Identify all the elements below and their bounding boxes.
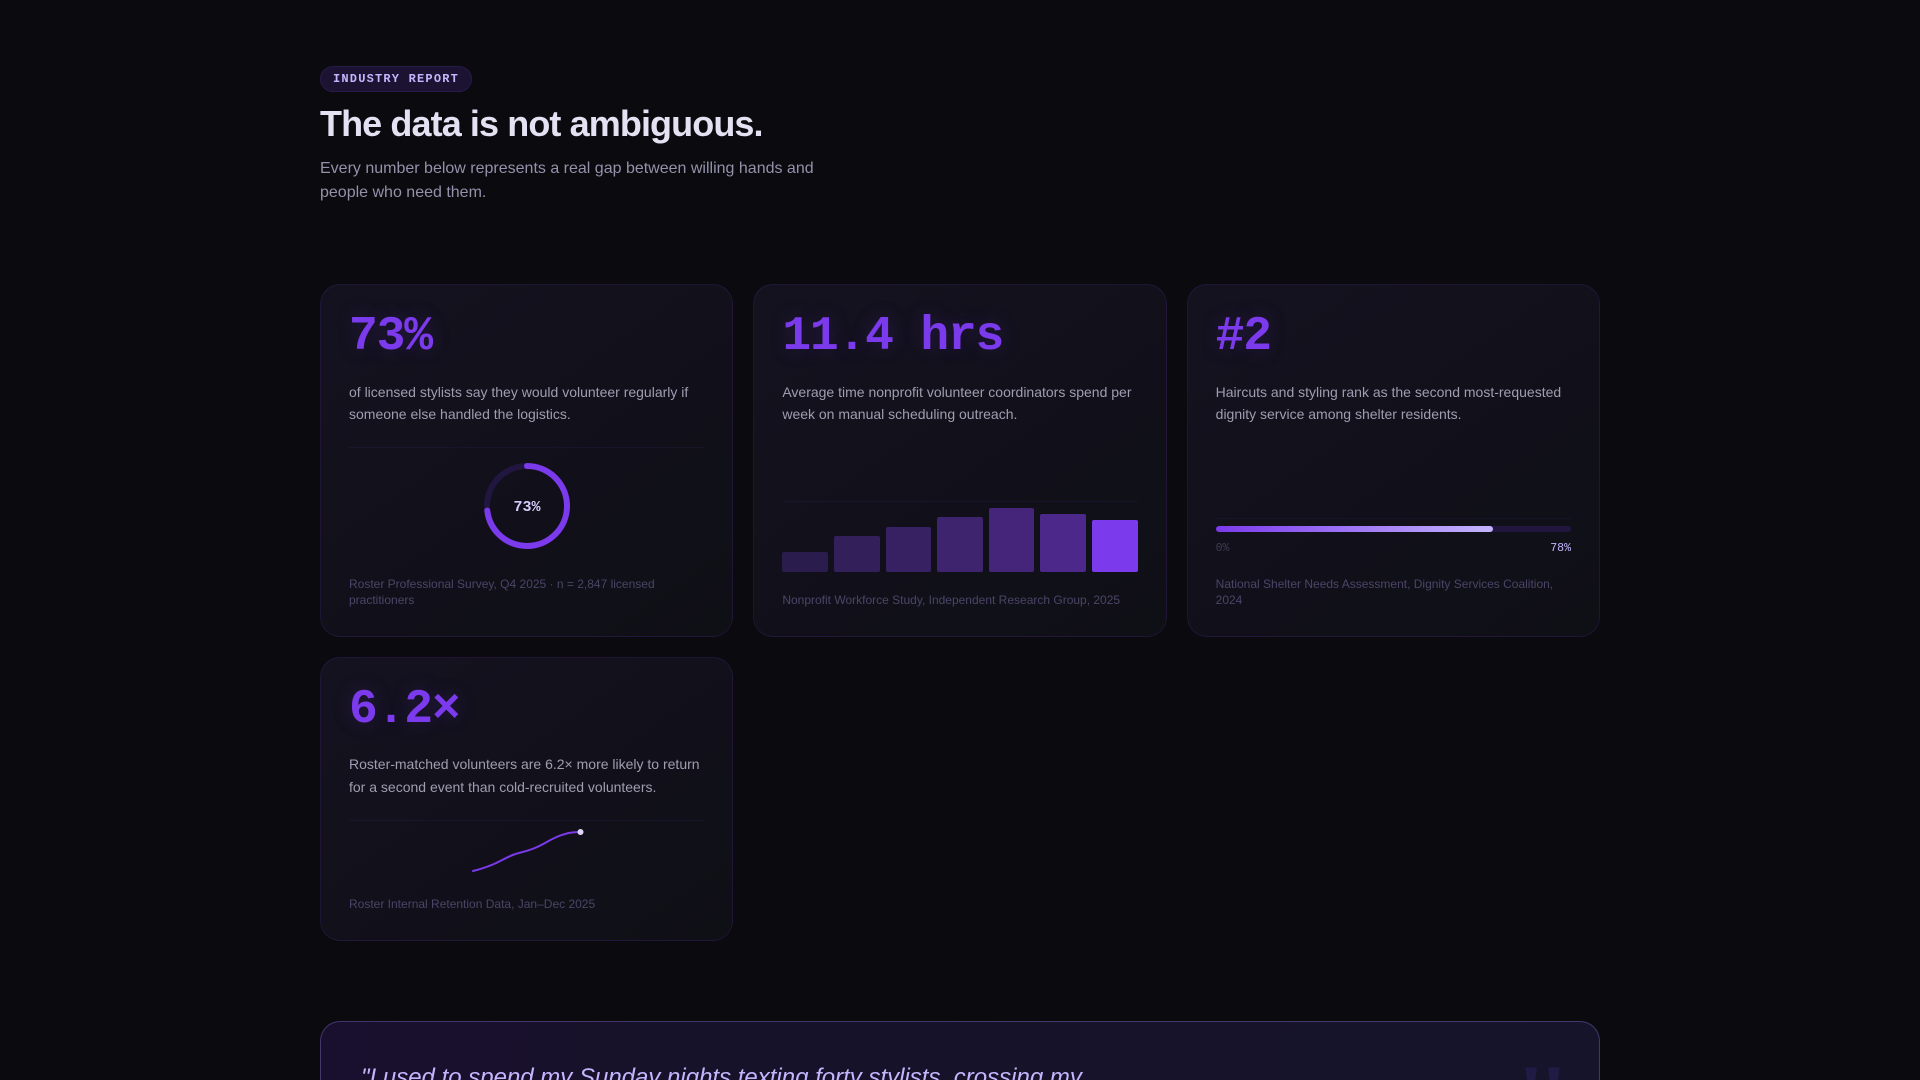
source: Nonprofit Workforce Study, Independent Research Group, 2025: [782, 593, 1120, 607]
title: The data is not ambiguous.: [320, 103, 763, 144]
sparkline: [472, 829, 584, 872]
progress labels: [1216, 542, 1571, 555]
source: Roster Internal Retention Data, Jan–Dec 2025: [349, 896, 595, 910]
description: Roster-matched volunteers are 6.2× more likely to return for a second event than cold-recruited volunteers.: [349, 756, 700, 795]
badge: industry report: [320, 66, 472, 92]
description: Haircuts and styling rank as the second most-requested dignity service among shelter residents.: [1216, 384, 1561, 422]
source: National Shelter Needs Assessment, Dignity Services Coalition, 2024: [1216, 577, 1553, 607]
description: of licensed stylists say they would volunteer regularly if someone else handled the logistics.: [349, 384, 688, 422]
stat number: 11.4 hrs: [782, 310, 1003, 364]
donut chart: [484, 463, 570, 549]
stat number: #2: [1216, 310, 1271, 364]
stat number: 6.2×: [349, 683, 459, 737]
progress labels: 78%: [1550, 542, 1571, 555]
progress labels: 0%: [1216, 542, 1229, 555]
panel: 6.2x stat: [320, 657, 733, 941]
description: Average time nonprofit volunteer coordinators spend per week on manual scheduling outreach.: [782, 384, 1132, 422]
panel: quote: [320, 1021, 1600, 1080]
stat number: 73%: [349, 310, 432, 364]
source: Roster Professional Survey, Q4 2025 · n = 2,847 licensed practitioners: [349, 577, 655, 607]
panel: 11.4 hrs stat: [753, 284, 1167, 637]
subtitle: Every number below represents a real gap between willing hands and people who need them.: [320, 160, 814, 201]
donut chart: 73%: [513, 499, 541, 516]
badge: industry report: INDUSTRY REPORT: [333, 72, 459, 86]
panel: 73% stat: [320, 284, 733, 637]
panel: #2 stat: [1187, 284, 1600, 637]
header: [320, 66, 814, 201]
bar chart: [782, 508, 1138, 572]
progress bar: [1216, 526, 1571, 532]
